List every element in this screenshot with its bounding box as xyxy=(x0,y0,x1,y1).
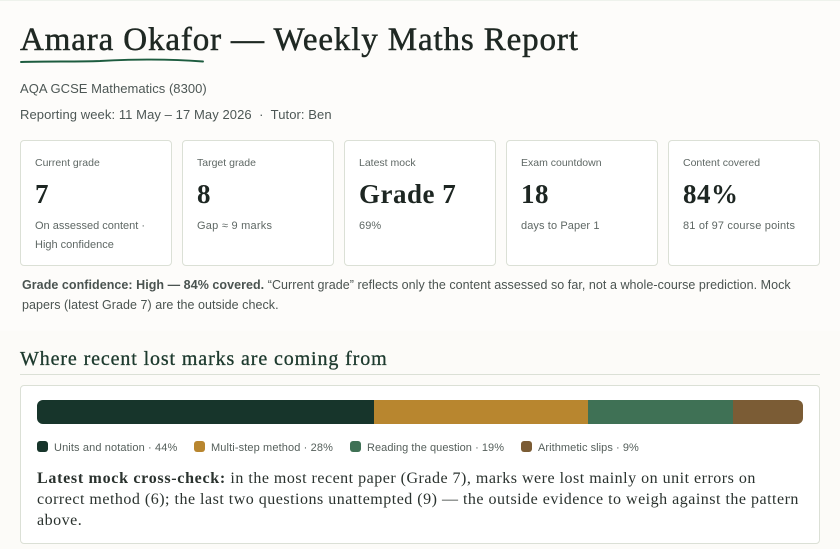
card: current grade: 7 xyxy=(35,179,49,209)
section heading: Where recent lost marks are coming from xyxy=(20,348,388,370)
grade confidence note: Grade confidence: High — 84% covered. “Current grade” reflects only the content assessed so far, not a whole-course prediction. Mock xyxy=(22,278,791,292)
card: target grade: 8 xyxy=(197,179,211,209)
card: content covered xyxy=(668,140,820,266)
card: content covered: Content covered xyxy=(683,157,760,169)
card: exam countdown: 18 xyxy=(521,179,549,209)
card: latest mock xyxy=(344,140,496,266)
card: latest mock: Grade 7 xyxy=(359,179,456,209)
legend: arithmetic slips: Arithmetic slips · 9% xyxy=(538,442,639,454)
legend: multi-step method: Multi-step method · 28% xyxy=(211,442,333,454)
top accent band xyxy=(0,0,840,1)
segment: units and notation 44% xyxy=(37,400,374,424)
section divider xyxy=(20,374,820,375)
title underline squiggle xyxy=(20,58,204,63)
card: exam countdown: days to Paper 1 xyxy=(521,220,600,232)
segment: reading the question 19% xyxy=(588,400,733,424)
card: current grade: On assessed content · xyxy=(35,220,145,232)
card: current grade: Current grade xyxy=(35,157,100,169)
stacked bar chart xyxy=(37,400,803,424)
segment: arithmetic slips 9% xyxy=(733,400,803,424)
lower section background xyxy=(0,331,840,549)
panel: lost marks xyxy=(20,385,820,544)
card: current grade xyxy=(20,140,172,266)
card: latest mock: 69% xyxy=(359,220,381,232)
mock cross-check text: above. xyxy=(37,512,82,529)
mock cross-check text: Latest mock cross-check: in the most recent paper (Grade 7), marks were lost mainly on unit errors on xyxy=(37,470,756,487)
card: target grade: Target grade xyxy=(197,157,256,169)
segment: multi-step method 28% xyxy=(374,400,588,424)
card: exam countdown: Exam countdown xyxy=(521,157,602,169)
grade confidence note: papers (latest Grade 7) are the outside check. xyxy=(22,298,279,312)
grade confidence note xyxy=(22,278,791,312)
mock cross-check text: correct method (6); the last two questions unattempted (9) — the outside evidence to weigh against the pattern xyxy=(37,491,799,508)
title: Amara Okafor — Weekly Maths Report xyxy=(20,22,579,58)
card: target grade xyxy=(182,140,334,266)
subtitle: course: AQA GCSE Mathematics (8300) xyxy=(20,81,207,96)
card: latest mock: Latest mock xyxy=(359,157,416,169)
card: current grade: High confidence xyxy=(35,239,114,251)
card: content covered: 84% xyxy=(683,179,738,209)
legend: reading the question: Reading the question · 19% xyxy=(367,442,504,454)
legend: units and notation: Units and notation · 44% xyxy=(54,442,177,454)
card: content covered: 81 of 97 course points xyxy=(683,220,795,232)
card: exam countdown xyxy=(506,140,658,266)
mock cross-check text xyxy=(37,470,799,529)
card: target grade: Gap ≈ 9 marks xyxy=(197,220,272,232)
subtitle: reporting week: Reporting week: 11 May – 17 May 2026 · Tutor: Ben xyxy=(20,107,332,122)
